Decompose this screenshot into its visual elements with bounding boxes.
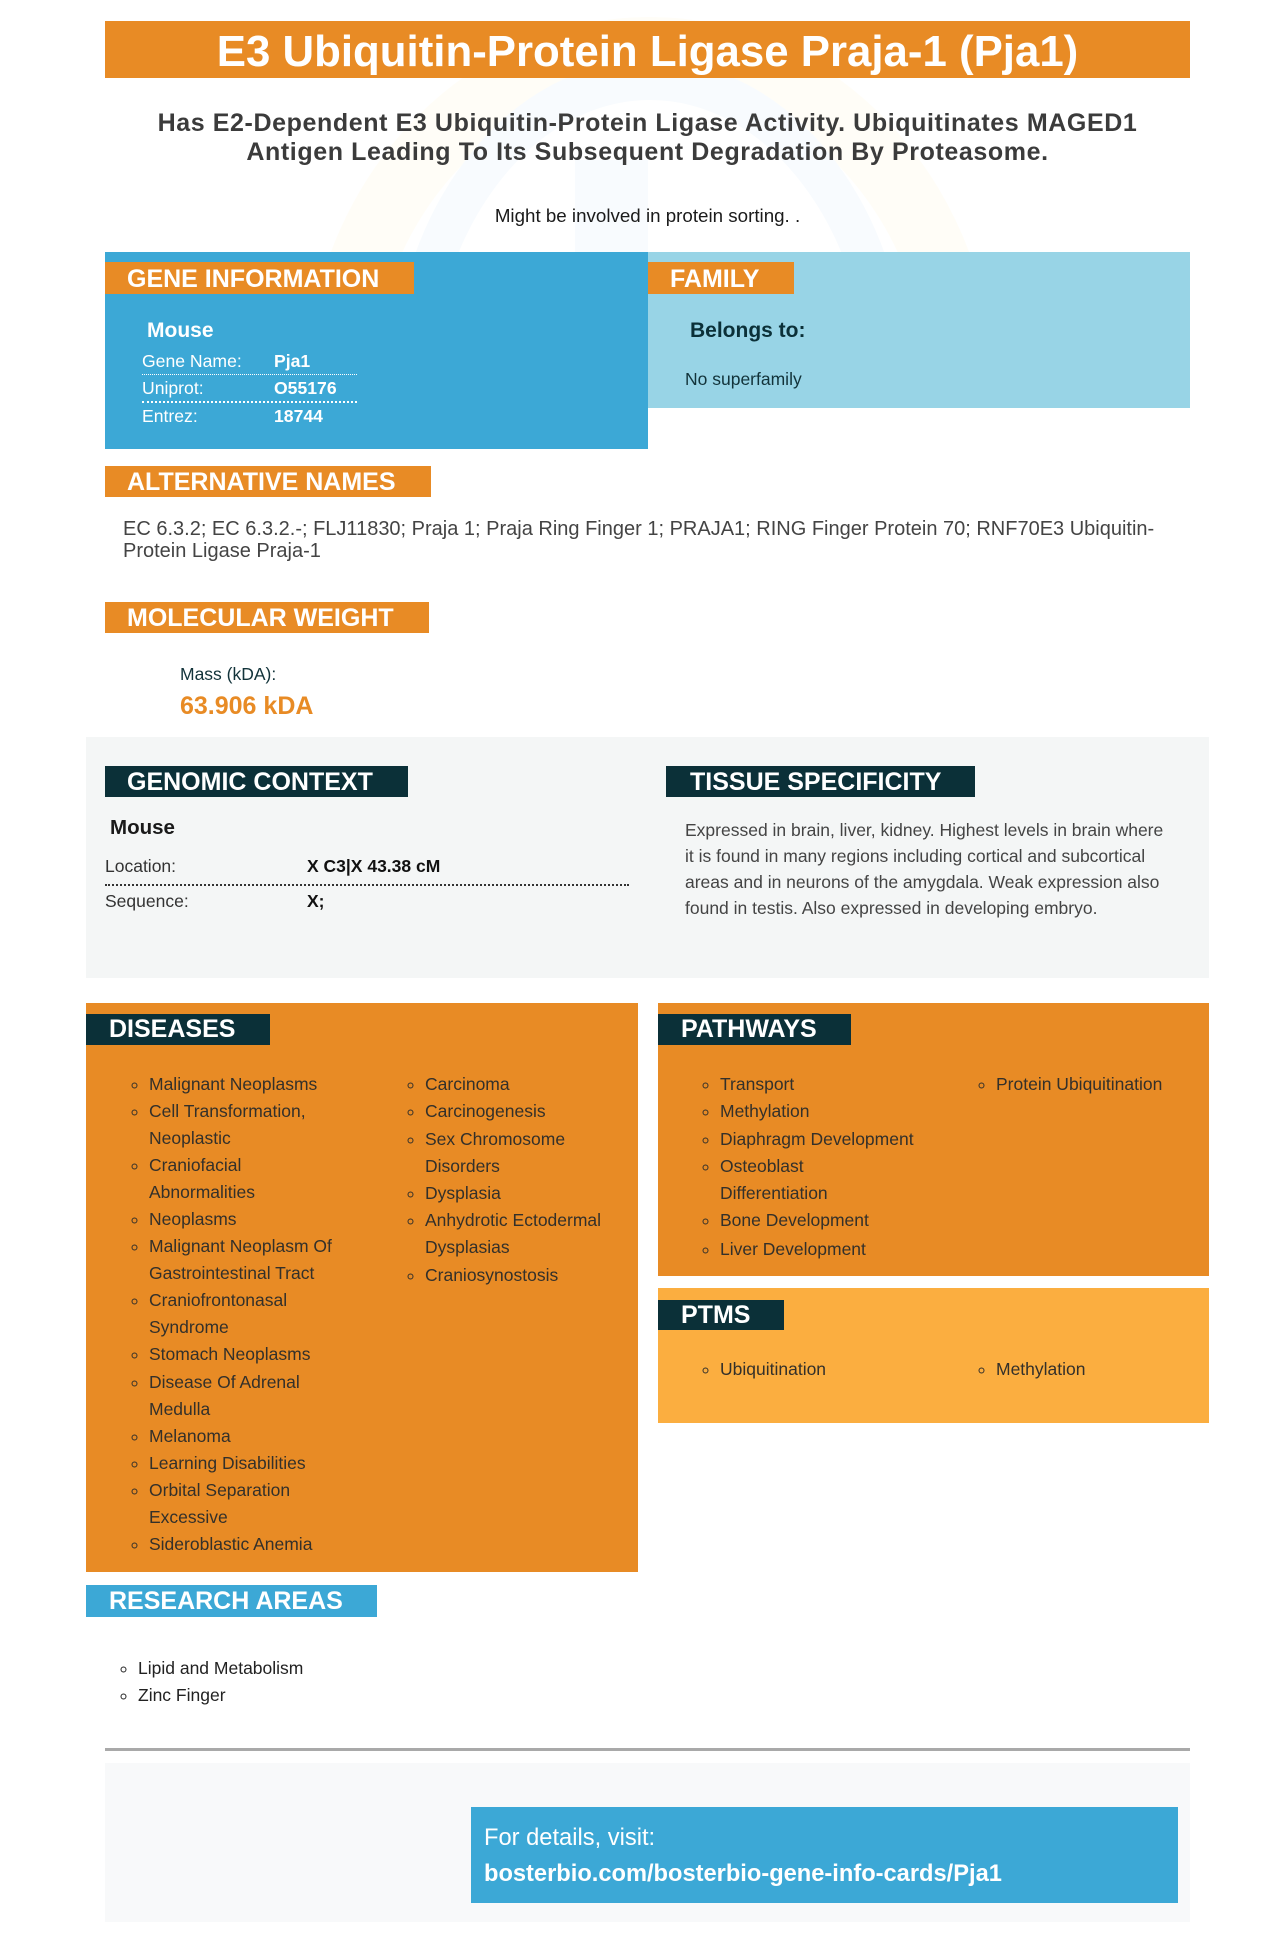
heading: family: FAMILY <box>670 265 759 293</box>
panel: pathways <box>658 1003 1209 1276</box>
panel: diseases <box>86 1003 638 1572</box>
heading: gene information: GENE INFORMATION <box>127 265 379 293</box>
entrez row <box>142 406 323 426</box>
heading: tissue specificity: TISSUE SPECIFICITY <box>690 768 941 796</box>
location row: Location: <box>105 856 176 876</box>
background watermark logo <box>0 0 1288 300</box>
gene name row <box>142 349 357 375</box>
title: E3 Ubiquitin-Protein Ligase Praja-1 (Pja1) <box>217 27 1078 76</box>
gene name row: Pja1 <box>274 351 310 371</box>
uniprot row: O55176 <box>274 378 337 398</box>
disease list column 2: Dysplasia <box>425 1183 501 1203</box>
ptm list column 1: Ubiquitination <box>720 1359 826 1379</box>
species label: Mouse <box>110 816 175 839</box>
alternative names text <box>123 518 1154 562</box>
pathway list column 1: Osteoblast <box>720 1156 804 1176</box>
heading: family <box>648 262 794 294</box>
call to action box <box>471 1807 1178 1903</box>
heading: ptms <box>658 1300 784 1330</box>
title <box>105 21 1190 78</box>
disease list column 1: Melanoma <box>149 1426 231 1446</box>
heading: diseases <box>86 1014 270 1045</box>
uniprot row <box>142 376 357 403</box>
disease list column 1: Orbital Separation <box>149 1480 290 1500</box>
disease list column 1: Stomach Neoplasms <box>149 1344 310 1364</box>
heading: pathways: PATHWAYS <box>681 1015 817 1043</box>
disease list column 2: Craniosynostosis <box>425 1265 558 1285</box>
sequence row <box>105 891 324 911</box>
disease list column 1: Abnormalities <box>149 1182 255 1202</box>
pathway list column 1: Liver Development <box>720 1239 866 1259</box>
disease list column 2: Carcinoma <box>425 1074 510 1094</box>
disease list column 1: Sideroblastic Anemia <box>149 1534 312 1554</box>
disease list column 1: Excessive <box>149 1507 228 1527</box>
disease list column 1: Craniofacial <box>149 1155 241 1175</box>
tissue specificity text: it is found in many regions including cortical and subcortical <box>685 846 1145 866</box>
heading: pathways <box>658 1014 851 1045</box>
alternative names text: Protein Ligase Praja-1 <box>123 540 321 562</box>
subtitle <box>158 109 1137 166</box>
disease list column 2: Dysplasias <box>425 1237 510 1257</box>
species label: Mouse <box>147 319 214 342</box>
pathway list column 1 <box>702 1074 914 1259</box>
research areas list: Lipid and Metabolism <box>138 1658 303 1678</box>
disease list column 2: Anhydrotic Ectodermal <box>425 1210 601 1230</box>
pathway list column 1: Bone Development <box>720 1210 869 1230</box>
research areas list <box>120 1658 303 1705</box>
pathway list column 1: Methylation <box>720 1101 810 1121</box>
disease list column 1: Malignant Neoplasm Of <box>149 1236 332 1256</box>
sequence row: Sequence: <box>105 891 189 911</box>
mass value: 63.906 kDA <box>180 692 313 720</box>
uniprot row: Uniprot: <box>142 378 204 398</box>
disease list column 1: Syndrome <box>149 1317 229 1337</box>
sequence row: X; <box>307 891 324 911</box>
ptm list column 2: Methylation <box>996 1359 1086 1379</box>
tissue specificity text: areas and in neurons of the amygdala. Weak expression also <box>685 872 1159 892</box>
pathway list column 1: Transport <box>720 1074 794 1094</box>
disease list column 1: Gastrointestinal Tract <box>149 1263 314 1283</box>
heading: genomic context: GENOMIC CONTEXT <box>127 768 373 796</box>
pathway list column 1: Differentiation <box>720 1183 828 1203</box>
disease list column 1: Malignant Neoplasms <box>149 1074 317 1094</box>
location row: X C3|X 43.38 cM <box>307 856 440 876</box>
disease list column 2: Carcinogenesis <box>425 1101 546 1121</box>
heading: research areas: RESEARCH AREAS <box>109 1587 343 1615</box>
entrez row: 18744 <box>274 406 323 426</box>
disease list column 2 <box>408 1074 601 1285</box>
mass label: Mass (kDA): <box>180 664 276 684</box>
heading: molecular weight: MOLECULAR WEIGHT <box>127 604 394 632</box>
pathway list column 2: Protein Ubiquitination <box>996 1074 1162 1094</box>
disease list column 1: Learning Disabilities <box>149 1453 306 1473</box>
alternative names text: EC 6.3.2; EC 6.3.2.-; FLJ11830; Praja 1; Praja Ring Finger 1; PRAJA1; RING Finger Protein 70; RNF70E3 Ubiquitin- <box>123 518 1154 540</box>
tissue specificity text <box>685 820 1163 918</box>
disease list column 1 <box>132 1074 332 1554</box>
tissue specificity text: Expressed in brain, liver, kidney. Highest levels in brain where <box>685 820 1163 840</box>
heading: ptms: PTMS <box>681 1301 750 1329</box>
panel: gene information <box>105 252 648 449</box>
disease list column 2: Disorders <box>425 1156 500 1176</box>
panel: genomic context and tissue specificity <box>86 737 1209 978</box>
gene name row: Gene Name: <box>142 351 242 371</box>
disease list column 1: Neoplastic <box>149 1128 231 1148</box>
panel: family <box>648 252 1190 408</box>
disease list column 1: Craniofrontonasal <box>149 1290 287 1310</box>
disease list column 1: Disease Of Adrenal <box>149 1372 300 1392</box>
heading: diseases: DISEASES <box>109 1015 235 1043</box>
disease list column 2: Sex Chromosome <box>425 1129 565 1149</box>
function note: Might be involved in protein sorting. . <box>495 205 800 226</box>
footer rule <box>105 1748 1190 1751</box>
details label: For details, visit: <box>484 1825 655 1851</box>
disease list column 1: Cell Transformation, <box>149 1101 306 1121</box>
tissue specificity text: found in testis. Also expressed in developing embryo. <box>685 898 1097 918</box>
superfamily value: No superfamily <box>685 369 802 389</box>
belongs to label: Belongs to: <box>690 319 806 342</box>
disease list column 1: Neoplasms <box>149 1209 237 1229</box>
entrez row: Entrez: <box>142 406 198 426</box>
disease list column 1: Medulla <box>149 1399 210 1419</box>
location row <box>105 854 629 886</box>
research areas list: Zinc Finger <box>138 1685 226 1705</box>
panel: ptms <box>658 1288 1209 1423</box>
pathway list column 1: Diaphragm Development <box>720 1129 914 1149</box>
panel: footer <box>105 1763 1190 1922</box>
subtitle: Antigen Leading To Its Subsequent Degradation By Proteasome. <box>246 138 1049 166</box>
subtitle: Has E2-Dependent E3 Ubiquitin-Protein Ligase Activity. Ubiquitinates MAGED1 <box>158 109 1137 137</box>
details link: bosterbio.com/bosterbio-gene-info-cards/Pja1 <box>484 1861 1002 1887</box>
heading: alternative names: ALTERNATIVE NAMES <box>127 468 396 496</box>
